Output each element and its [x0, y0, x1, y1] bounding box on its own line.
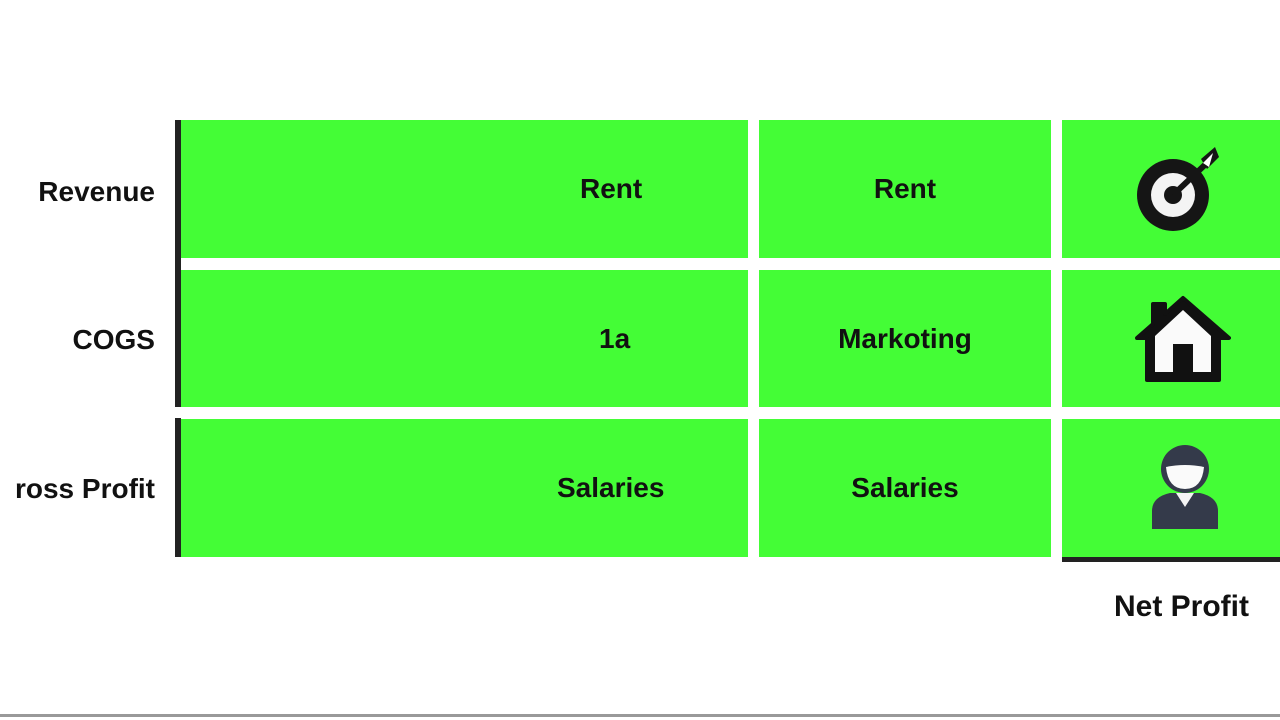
label: Net Profit: Net Profit [1114, 590, 1249, 623]
cell: row3 col2: Salaries [851, 472, 959, 503]
cell: row2 col1: 1a [599, 322, 630, 354]
cell: row1 col1 [181, 120, 748, 258]
cell: row2 col2 [759, 270, 1051, 407]
left axis line top [175, 120, 181, 407]
cell: row1 col2: Rent [874, 173, 936, 204]
cell: row1 col2 [759, 120, 1051, 258]
row label: Revenue: Revenue [38, 176, 155, 207]
cell: row3 icon person [1062, 419, 1280, 557]
cell: row1 icon target [1062, 120, 1280, 258]
net profit underline bar [1062, 557, 1280, 562]
bottom border line [0, 714, 1280, 717]
cell: row3 col2 [759, 419, 1051, 557]
cell: row3 col1 [181, 419, 748, 557]
cell: row2 col1 [181, 270, 748, 407]
row label: Gross Profit: ross Profit [15, 473, 155, 504]
cell: row2 col2: Markoting [838, 322, 972, 354]
left axis line bottom [175, 418, 181, 557]
cell: row1 col1: Rent [580, 173, 642, 204]
cell: row2 icon house [1062, 270, 1280, 407]
cell: row3 col1: Salaries [557, 472, 664, 503]
row label: COGS: COGS [73, 324, 155, 355]
